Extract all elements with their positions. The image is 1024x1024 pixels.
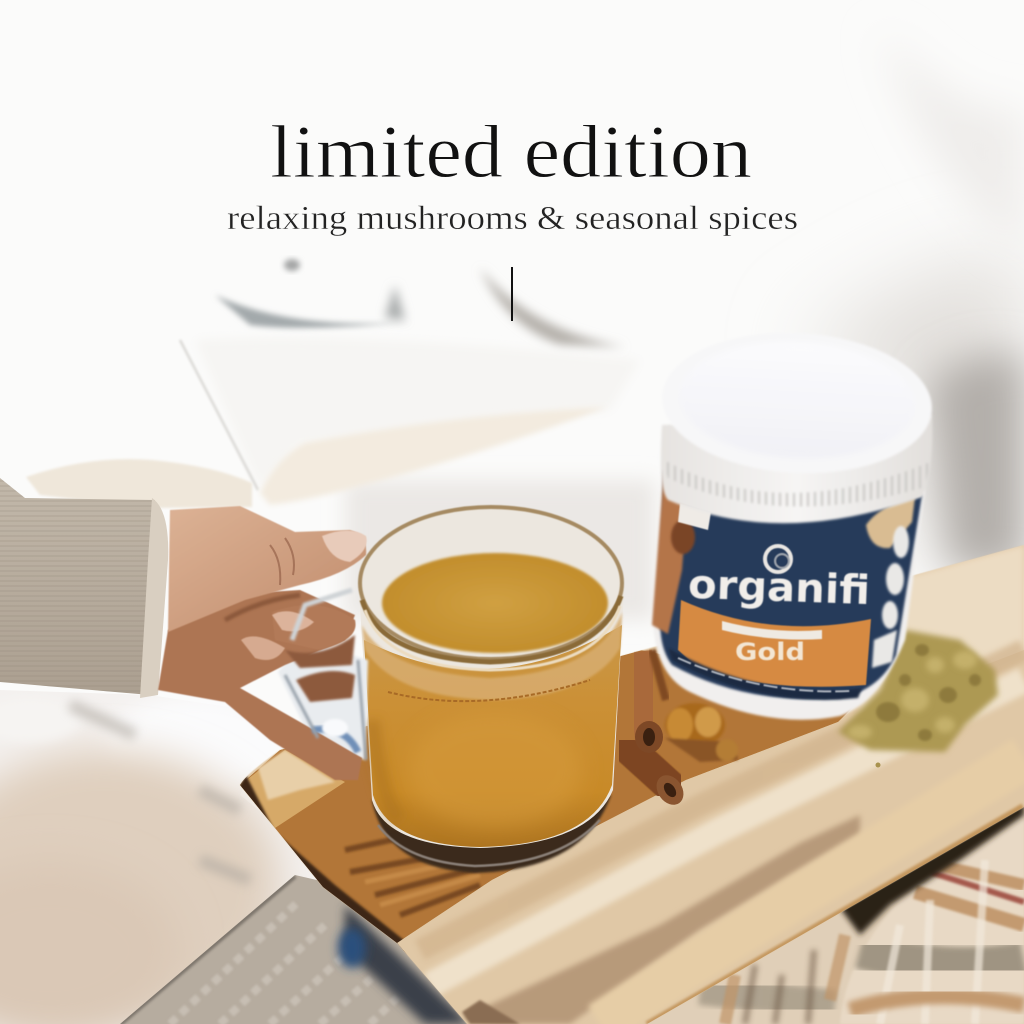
open book xyxy=(26,338,640,508)
cinnamon sticks and star anise xyxy=(628,650,738,810)
lid ridges xyxy=(664,460,930,506)
palm and lower finger xyxy=(158,590,362,780)
brand name: organifi xyxy=(687,562,871,614)
turmeric powder pile xyxy=(838,630,998,768)
finger nails xyxy=(272,611,314,631)
jar base xyxy=(653,460,925,720)
glass handle backdrop xyxy=(278,640,368,760)
mug glass wall xyxy=(359,507,624,848)
knit throw xyxy=(120,875,467,1024)
orange panel xyxy=(678,600,871,687)
book left page edge xyxy=(26,459,252,508)
glass rim xyxy=(360,507,622,659)
board rounded front edge xyxy=(587,831,864,1011)
board pale end piece xyxy=(240,750,345,830)
ginger root xyxy=(665,703,738,762)
label left spice panel xyxy=(652,470,688,634)
middle finger xyxy=(272,605,356,650)
board far light section xyxy=(860,546,1024,710)
label ginger illustration xyxy=(866,497,915,548)
liquid surface xyxy=(382,553,608,653)
board wood grain xyxy=(345,838,490,915)
product name: Gold xyxy=(735,638,805,666)
board grey stripe xyxy=(462,815,860,1024)
supplement jar xyxy=(652,326,935,720)
curled fingertip xyxy=(296,671,355,702)
plaid blanket xyxy=(648,807,1024,1024)
sweater sleeve xyxy=(0,478,168,698)
subtitle: relaxing mushrooms & seasonal spices xyxy=(227,200,798,237)
thumb nail xyxy=(322,530,367,562)
fluffy blanket xyxy=(0,690,500,1024)
product pill xyxy=(722,621,822,640)
mug base glass xyxy=(372,795,611,873)
mug handle glass xyxy=(285,590,366,760)
book right page edge xyxy=(260,407,607,505)
mug of golden drink xyxy=(359,507,624,873)
board dark edge xyxy=(238,775,410,968)
label badges xyxy=(872,526,909,668)
back of hand and thumb xyxy=(168,506,366,632)
liquid body xyxy=(364,625,622,847)
lid top xyxy=(659,326,935,480)
jar label navy xyxy=(660,470,922,699)
wooden board xyxy=(238,545,1024,1024)
front glass band xyxy=(362,612,622,700)
board dark wood section xyxy=(240,650,865,943)
divider line xyxy=(511,267,513,321)
ring finger xyxy=(285,635,355,668)
label bottom dark band text xyxy=(668,648,862,700)
cinnamon stick front xyxy=(637,652,650,738)
hand holding handle xyxy=(158,506,368,780)
cinnamon stick back xyxy=(628,748,672,788)
logo mark xyxy=(765,546,791,572)
lid rim xyxy=(661,415,932,523)
knuckle shading xyxy=(270,538,294,585)
board light plank xyxy=(397,650,1024,1024)
title: limited edition xyxy=(270,111,752,194)
